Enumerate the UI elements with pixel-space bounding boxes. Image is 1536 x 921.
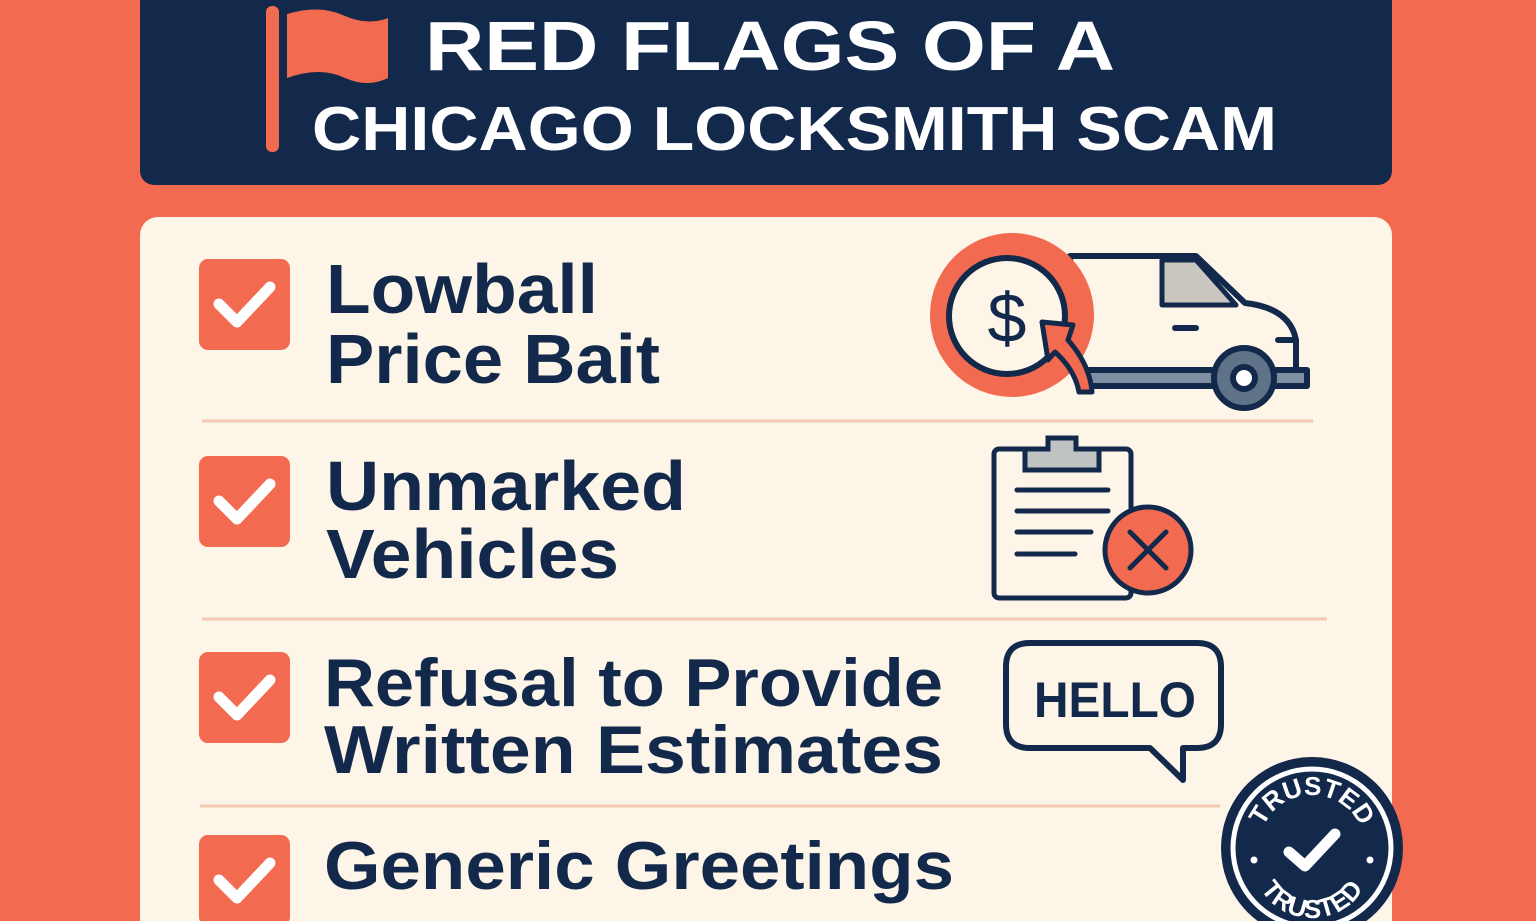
- panel: red flags list: [140, 217, 1392, 921]
- title: [312, 7, 1277, 164]
- item 1: Lowball Price Bait: Lowball: [326, 250, 598, 328]
- item 1: Lowball Price Bait: Price Bait: [326, 320, 660, 398]
- icon: HELLO speech bubble: HELLO: [1034, 672, 1196, 728]
- badge: trusted: TRUSTED: [1248, 776, 1372, 822]
- item 2: Unmarked Vehicles: Unmarked: [326, 447, 686, 525]
- item 2: Unmarked Vehicles: [199, 447, 686, 593]
- item 2: Unmarked Vehicles: Vehicles: [326, 515, 619, 593]
- icon: clipboard with X: [994, 438, 1191, 598]
- item 3: Refusal to Provide Written Estimates: Refusal to Provide: [324, 645, 943, 721]
- icon: van with dollar: $: [988, 279, 1026, 357]
- icon: van with dollar: [930, 233, 1307, 408]
- icon: HELLO speech bubble: [1006, 643, 1221, 780]
- item 4: Generic Greetings: Generic Greetings: [324, 828, 954, 904]
- title: CHICAGO LOCKSMITH SCAM: [312, 95, 1277, 164]
- badge: trusted: [1221, 757, 1403, 921]
- icon: red flag: [266, 6, 388, 152]
- title: RED FLAGS OF A: [425, 7, 1115, 85]
- header: [140, 0, 1392, 185]
- item 1: Lowball Price Bait: [199, 250, 660, 398]
- item 3: Refusal to Provide Written Estimates: [199, 645, 943, 788]
- item 3: Refusal to Provide Written Estimates: Written Estimates: [324, 712, 943, 788]
- item 4: Generic Greetings: [199, 828, 954, 921]
